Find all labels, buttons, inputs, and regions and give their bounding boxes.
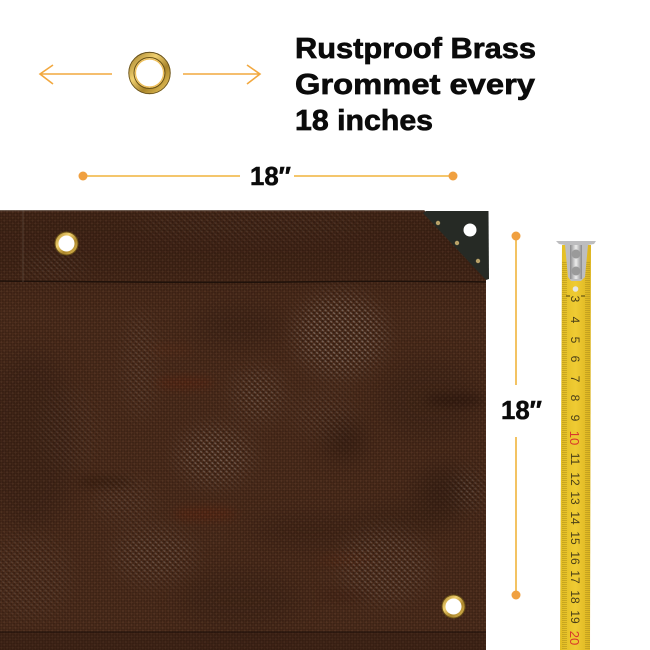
light worn weave patches: [0, 210, 490, 650]
tape numbers: 8: [568, 395, 582, 402]
tape numbers: 9: [568, 415, 582, 422]
tape numbers: 7: [568, 376, 582, 383]
tape numbers: 12: [568, 472, 582, 486]
reddish streaks: [86, 381, 480, 518]
heading: rustproof brass grommet: [295, 33, 536, 137]
horizontal 18 inch dimension line: [78, 161, 458, 191]
tarp panel: [0, 205, 520, 650]
tape numbers: 5: [568, 337, 582, 344]
arrow: right: [183, 65, 260, 84]
icon: grommet with double arrows: [40, 52, 260, 94]
label: 18 inches vertical: 18″: [501, 395, 542, 425]
heading: rustproof brass grommet: Rustproof Brass: [295, 33, 536, 65]
tape end hook: [556, 241, 596, 296]
heading: rustproof brass grommet: Grommet every: [295, 69, 535, 101]
grommet: bottom right: [442, 594, 466, 618]
tape numbers: [567, 296, 582, 645]
tape numbers: 3: [568, 296, 582, 303]
dark mottling: [0, 210, 478, 612]
tape numbers: 15: [568, 531, 582, 545]
tape numbers: 19: [568, 610, 582, 624]
grommet: top left: [54, 232, 78, 256]
tape numbers: 10: [567, 431, 582, 445]
icon: brass grommet: [129, 52, 170, 94]
corner reinforcement: [423, 211, 489, 280]
tape numbers: 20: [567, 631, 582, 645]
tape numbers: 13: [568, 491, 582, 505]
label: 18 inches horizontal: 18″: [250, 161, 291, 191]
tape numbers: 18: [568, 590, 582, 604]
tape numbers: 11: [568, 453, 582, 466]
arrow: left: [40, 65, 112, 84]
vertical 18 inch dimension line: [501, 232, 542, 600]
tape numbers: 17: [568, 570, 582, 584]
tape numbers: 6: [568, 356, 582, 363]
tape numbers: 14: [568, 511, 582, 525]
measuring tape: [556, 241, 596, 650]
tape numbers: 16: [568, 551, 582, 565]
hem seams: [0, 281, 486, 282]
heading: rustproof brass grommet: 18 inches: [295, 105, 433, 137]
tape numbers: 4: [568, 317, 582, 324]
